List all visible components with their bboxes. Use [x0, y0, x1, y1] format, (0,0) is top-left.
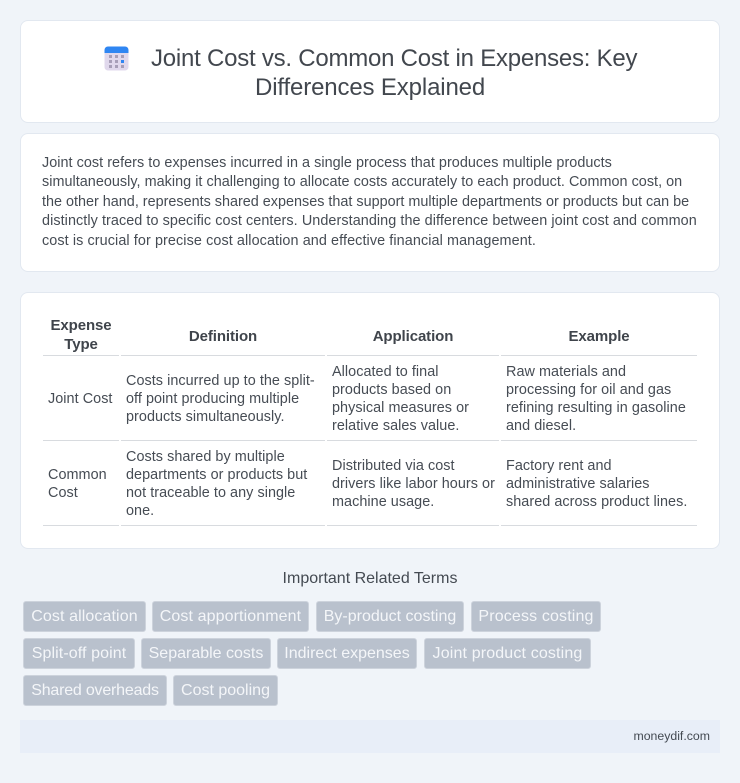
table header: Type [64, 336, 98, 353]
table row: joint cost [43, 364, 697, 441]
table row: joint cost: processing for oil and gas [506, 382, 671, 398]
tags: related terms: Split-off point [32, 645, 126, 662]
tags: related terms: Joint product costing [433, 645, 582, 662]
tags: related terms: Cost apportionment [160, 608, 301, 625]
table row: joint cost: Joint Cost [48, 391, 112, 407]
table row: common cost [43, 449, 697, 526]
panel: comparison table [20, 292, 720, 549]
table row: common cost: Distributed via cost [332, 458, 455, 474]
table row: common cost: Costs shared by multiple [126, 449, 285, 465]
table row: joint cost: Raw materials and [506, 364, 626, 380]
table row: common cost: Factory rent and [506, 458, 612, 474]
text block: description: the other hand, represents shared expenses that support multiple departments or products but can be [42, 194, 689, 210]
table row: joint cost: physical measures or [332, 400, 469, 416]
text block: description: cost is crucial for precise cost allocation and effective financial management. [42, 233, 536, 249]
text block: description: simultaneously, making it challenging to allocate costs accurately to each product. Common cost, on [42, 174, 682, 190]
table row: common cost: drivers like labor hours or [332, 476, 495, 492]
text block: description: Joint cost refers to expenses incurred in a single process that produces multiple products [42, 155, 612, 171]
tags: related terms: Cost pooling [181, 682, 270, 699]
table header: Application [373, 328, 453, 345]
table row: common cost: one. [126, 503, 154, 519]
tags: related terms [23, 601, 601, 706]
tags: related terms: Process costing [478, 608, 594, 625]
table row: joint cost: refining resulting in gasoline [506, 400, 686, 416]
footer [20, 720, 720, 753]
tags: related terms: By-product costing [324, 608, 456, 625]
table row: joint cost: products based on [332, 382, 451, 398]
panel: description [20, 133, 720, 272]
title [151, 45, 638, 101]
text block: description: distinctly traced to specific cost centers. Understanding the difference between joint cost and common [42, 213, 697, 229]
table row: common cost: administrative salaries [506, 476, 650, 492]
table header: Definition [189, 328, 257, 345]
table row: common cost: Common [48, 467, 107, 483]
table row: joint cost: and diesel. [506, 418, 576, 434]
table row: joint cost: relative sales value. [332, 418, 459, 434]
table header: Expense [50, 317, 112, 334]
title: Joint Cost vs. Common Cost in Expenses: Key [151, 45, 637, 72]
table header [43, 317, 697, 356]
tags: related terms: Separable costs [149, 645, 263, 662]
table row: joint cost: Allocated to final [332, 364, 438, 380]
table row: joint cost: off point producing multiple [126, 391, 299, 407]
footer source text: moneydif.com [633, 729, 710, 743]
table header: Example [568, 328, 630, 345]
table row: common cost: not traceable to any single [126, 485, 295, 501]
heading: important related terms: Important Related Terms [283, 570, 457, 587]
table row: common cost: shared across product lines. [506, 494, 687, 510]
tags: related terms: Cost allocation [31, 608, 138, 625]
table row: common cost: Cost [48, 485, 78, 501]
text block: description [42, 155, 697, 249]
table row: common cost: departments or products but [126, 467, 307, 483]
table row: joint cost: Costs incurred up to the split- [126, 373, 315, 389]
title: Differences Explained [255, 74, 485, 101]
panel: title header [20, 20, 720, 123]
table row: common cost: machine usage. [332, 494, 434, 510]
table row: joint cost: products simultaneously. [126, 409, 285, 425]
tags: related terms: Indirect expenses [284, 645, 410, 662]
icon: calendar [104, 46, 128, 70]
tags: related terms: Shared overheads [31, 682, 159, 699]
